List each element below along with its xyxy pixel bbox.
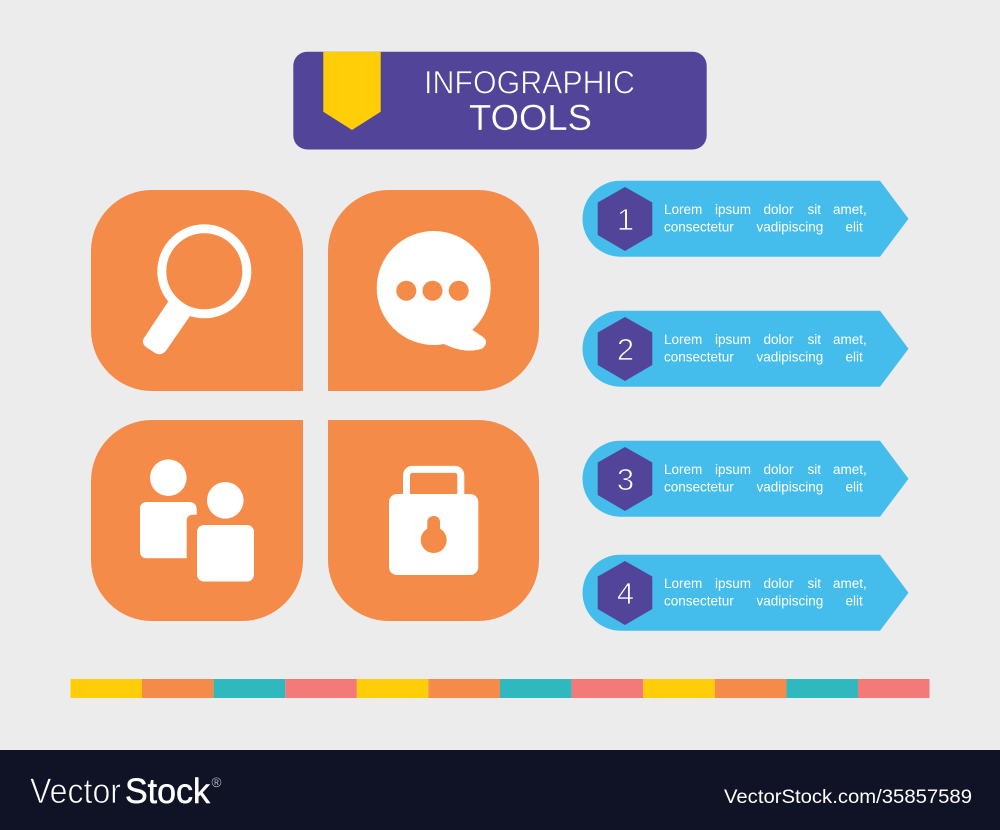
title line 2: TOOLS	[469, 97, 592, 138]
text block 4: Lorem	[664, 576, 702, 591]
number 2: 2	[617, 332, 634, 367]
icon: speech bubble	[377, 231, 491, 351]
text block 1: consectetur	[664, 220, 734, 234]
text block 4: dolor	[764, 576, 794, 591]
colour strip	[70, 679, 930, 698]
icon: padlock	[389, 469, 478, 575]
title banner	[293, 52, 707, 150]
text block 1: Lorem	[664, 202, 702, 217]
registered mark: ®	[212, 775, 222, 790]
text block 4	[664, 576, 867, 608]
logo word: Vector: Vector	[30, 772, 121, 811]
number 3: 3	[617, 462, 634, 497]
icon: yellow bookmark ribbon	[323, 52, 381, 130]
text block 2: elit	[846, 350, 863, 364]
hexagon badge 3	[598, 447, 652, 511]
text block 4: vadipiscing	[756, 594, 823, 608]
title line 1: INFOGRAPHIC	[424, 64, 635, 100]
text block 3: consectetur	[664, 480, 734, 494]
text block 4: consectetur	[664, 594, 734, 608]
text block 4: amet,	[833, 576, 867, 591]
footer logo	[30, 772, 222, 811]
text block 1	[664, 202, 867, 234]
text block 2: consectetur	[664, 350, 734, 364]
panel: people tile	[91, 420, 303, 621]
text block 2: vadipiscing	[756, 350, 823, 364]
text block 3: ipsum	[715, 462, 751, 477]
hexagon badge 1	[598, 187, 652, 251]
panel: search tile	[91, 190, 303, 391]
text block 1: sit	[808, 202, 821, 217]
text block 1: amet,	[833, 202, 867, 217]
logo word: Stock: Stock	[125, 772, 210, 811]
text block 2: sit	[808, 332, 821, 347]
hexagon badge 4	[598, 561, 652, 625]
icon: magnifying glass	[143, 229, 247, 354]
text block 1: vadipiscing	[756, 220, 823, 234]
number 4: 4	[617, 576, 634, 611]
panel: chat tile	[328, 190, 539, 391]
text block 1: ipsum	[715, 202, 751, 217]
text block 4: sit	[808, 576, 821, 591]
text block 3: sit	[808, 462, 821, 477]
footer url: VectorStock.com/35857589	[724, 786, 972, 808]
text block 3: Lorem	[664, 462, 702, 477]
callout 2	[582, 311, 908, 387]
text block 4: ipsum	[715, 576, 751, 591]
number 1: 1	[617, 202, 634, 237]
text block 3: vadipiscing	[756, 480, 823, 494]
text block 1: dolor	[764, 202, 794, 217]
footer bar	[0, 750, 1000, 830]
text block 2: Lorem	[664, 332, 702, 347]
text block 2	[664, 332, 867, 364]
callout 1	[582, 181, 908, 257]
callout 3	[582, 441, 908, 517]
hexagon badge 2	[598, 317, 652, 381]
panel: lock tile	[328, 420, 539, 621]
callout 4	[583, 555, 908, 631]
text block 4: elit	[846, 594, 863, 608]
text block 3: elit	[846, 480, 863, 494]
text block 2: amet,	[833, 332, 867, 347]
text block 2: dolor	[764, 332, 794, 347]
text block 3	[664, 462, 867, 494]
text block 2: ipsum	[715, 332, 751, 347]
text block 3: amet,	[833, 462, 867, 477]
icon: two people	[140, 459, 254, 582]
text block 1: elit	[846, 220, 863, 234]
text block 3: dolor	[764, 462, 794, 477]
